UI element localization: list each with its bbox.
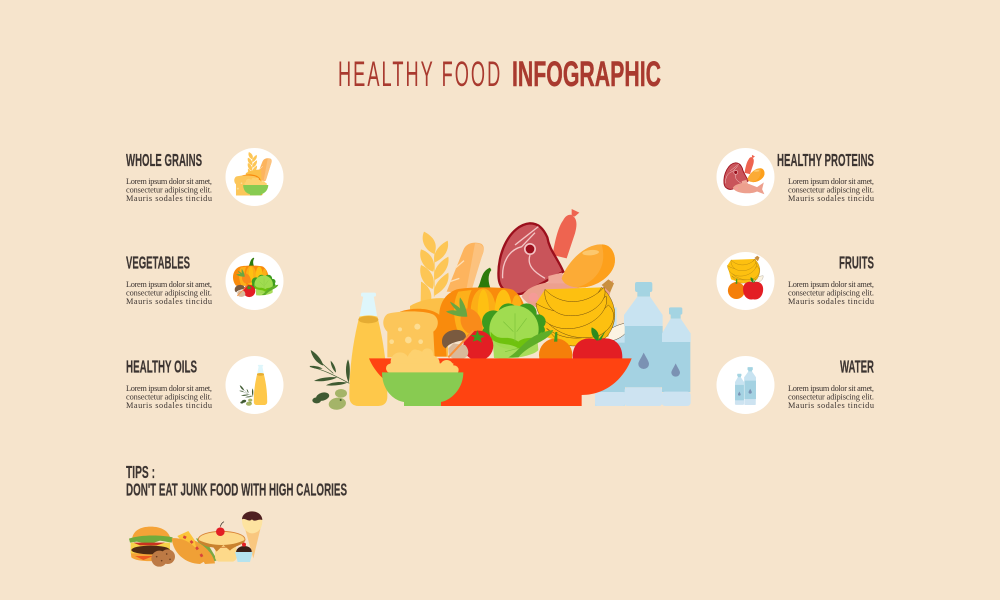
text block: fruits: Mauris sodales tincidu [788, 297, 874, 306]
title: HEALTHY FOOD [338, 55, 500, 94]
panel: water [716, 356, 874, 414]
text block: fruits: Lorem ipsum dolor sit amet, [788, 280, 874, 289]
text block: whole grains: Mauris sodales tincidu [126, 194, 212, 203]
icon: whole grains [226, 148, 284, 206]
text block: healthy oils: Mauris sodales tincidu [126, 401, 212, 410]
tacos [172, 531, 217, 564]
text block: fruits [788, 280, 874, 306]
cookies [151, 549, 175, 567]
text block: water: consectetur adipiscing elit. [788, 392, 874, 401]
panel: healthy oils [126, 356, 284, 414]
tips text: TIPS : [126, 462, 155, 482]
text block: healthy proteins: Mauris sodales tincidu [788, 194, 874, 203]
heading: healthy proteins: HEALTHY PROTEINS [777, 150, 874, 170]
text block: whole grains: consectetur adipiscing elit. [126, 185, 212, 194]
panel: vegetables [126, 252, 284, 310]
text block: healthy oils: Lorem ipsum dolor sit amet, [126, 384, 212, 393]
red serving plate [369, 358, 632, 406]
central food illustration [309, 209, 691, 411]
text block: healthy oils [126, 384, 212, 410]
title: INFOGRAPHIC [512, 55, 661, 94]
panel: fruits [716, 252, 874, 310]
panel: whole grains [126, 148, 284, 206]
text block: water: Mauris sodales tincidu [788, 401, 874, 410]
icon: vegetables [226, 252, 284, 310]
cupcake [235, 543, 253, 562]
text block: whole grains: Lorem ipsum dolor sit amet, [126, 177, 212, 186]
text block: fruits: consectetur adipiscing elit. [788, 288, 874, 297]
title [338, 55, 661, 94]
green bowl of porridge [382, 348, 463, 406]
icon: healthy oils [226, 356, 284, 414]
text block: water [788, 384, 874, 410]
text block: vegetables [126, 280, 212, 306]
text block: healthy proteins [788, 177, 874, 203]
text block: healthy oils: consectetur adipiscing elit. [126, 392, 212, 401]
heading: water: WATER [840, 357, 874, 377]
junk food illustration [129, 511, 262, 567]
heading: vegetables: VEGETABLES [126, 252, 190, 272]
icon: healthy proteins [716, 148, 774, 206]
heading: healthy oils: HEALTHY OILS [126, 357, 197, 377]
text block: vegetables: Lorem ipsum dolor sit amet, [126, 280, 212, 289]
text block: whole grains [126, 177, 212, 203]
tips text [126, 462, 347, 500]
icon: fruits [716, 252, 774, 310]
panel: healthy proteins [716, 148, 874, 206]
ice cream cone [242, 511, 262, 558]
heading: fruits: FRUITS [839, 252, 874, 272]
pancakes with cherry [198, 522, 245, 562]
text block: healthy proteins: Lorem ipsum dolor sit amet, [788, 177, 874, 186]
heading: whole grains: WHOLE GRAINS [126, 150, 202, 170]
tips text: DON'T EAT JUNK FOOD WITH HIGH CALORIES [126, 480, 347, 500]
burger [129, 527, 173, 561]
text block: vegetables: Mauris sodales tincidu [126, 297, 212, 306]
icon: water [716, 356, 774, 414]
text block: healthy proteins: consectetur adipiscing elit. [788, 185, 874, 194]
text block: vegetables: consectetur adipiscing elit. [126, 288, 212, 297]
text block: water: Lorem ipsum dolor sit amet, [788, 384, 874, 393]
